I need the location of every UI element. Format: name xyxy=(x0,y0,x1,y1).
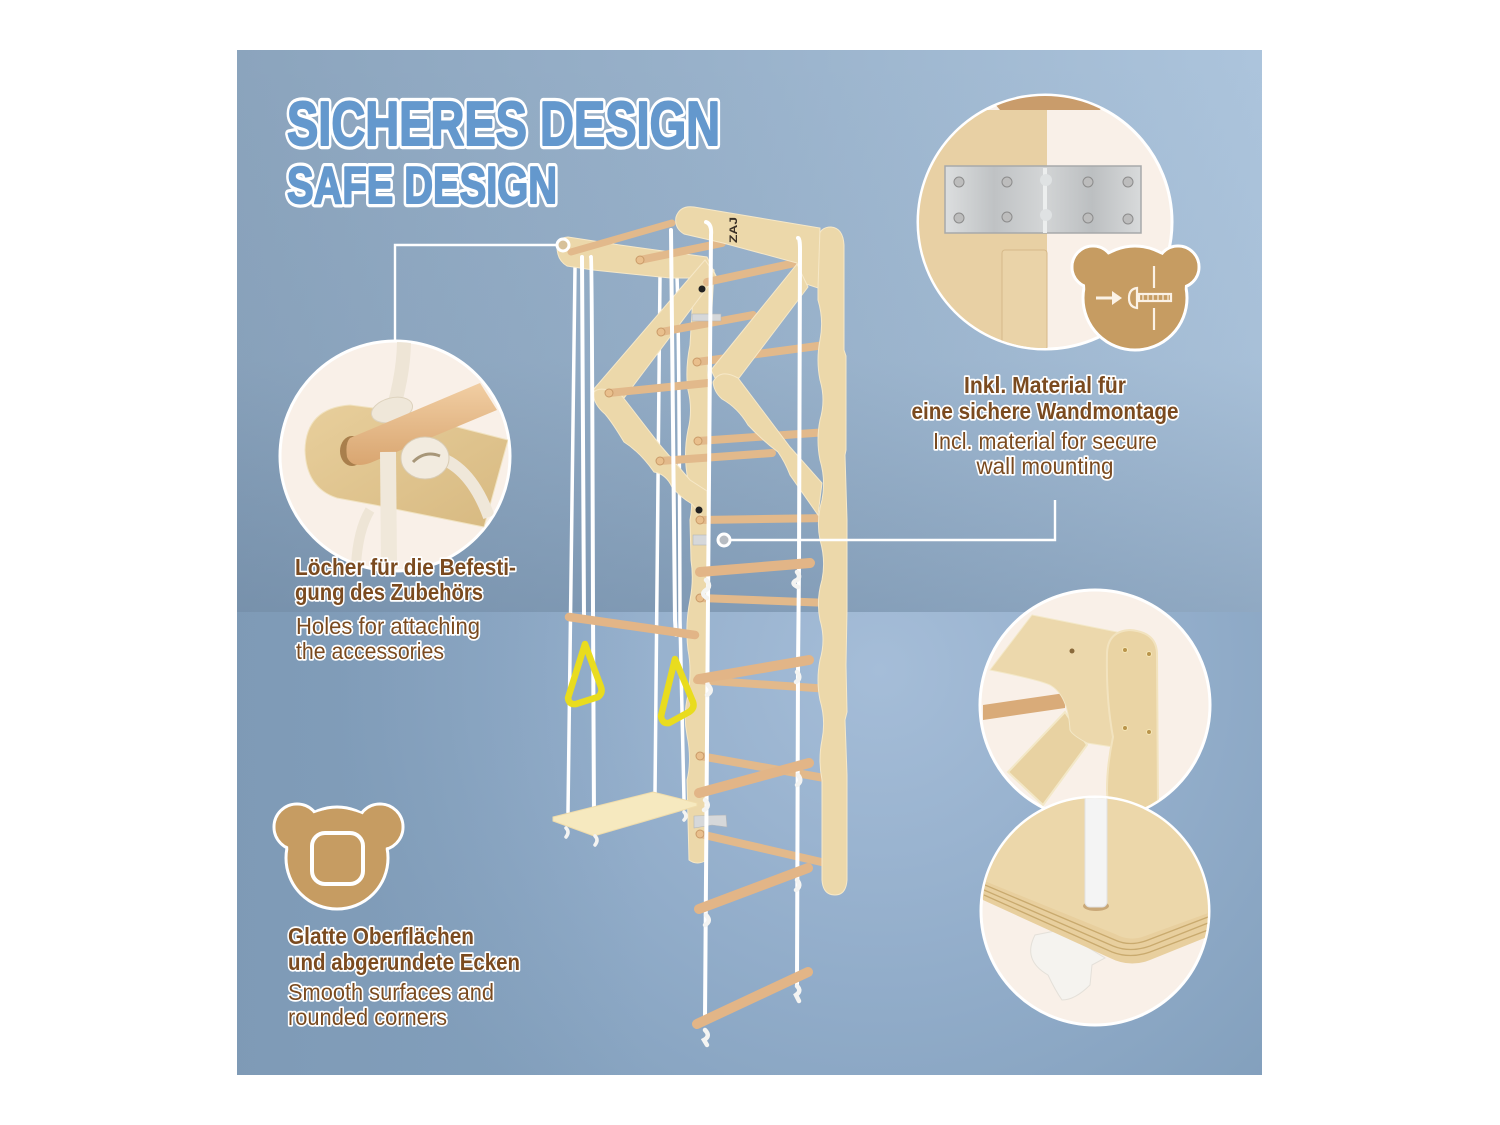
top edge of plate xyxy=(996,96,1100,110)
rope ladder rungs xyxy=(697,563,810,1024)
right top plate xyxy=(676,207,820,288)
panel: joint detail circle xyxy=(980,590,1210,820)
rope hole xyxy=(1083,904,1109,911)
title: SICHERES DESIGN xyxy=(287,90,720,159)
panel: swing seat detail circle xyxy=(975,780,1214,1025)
hole xyxy=(340,436,357,466)
rung ends xyxy=(605,256,704,838)
diagonal brace xyxy=(1008,712,1087,805)
callout line: accessory holes xyxy=(395,239,569,342)
text: wall mounting xyxy=(912,372,1178,479)
rung xyxy=(983,693,1065,720)
yellow ring left xyxy=(568,644,602,704)
lower knot xyxy=(401,437,449,479)
callout line: wall mounting xyxy=(718,500,1055,546)
front ropes xyxy=(582,222,800,1018)
title xyxy=(287,90,720,215)
text: wall mounting: eine sichere Wandmontage xyxy=(912,398,1178,424)
wall bars climbing frame xyxy=(553,207,847,1045)
left post xyxy=(685,262,714,863)
text: wall mounting: Inkl. Material für xyxy=(964,372,1126,398)
text: holes for accessories: Holes for attaching xyxy=(296,613,480,639)
metal brackets xyxy=(692,314,727,828)
white rope xyxy=(1085,795,1107,907)
hanging rope xyxy=(388,452,389,565)
upright post xyxy=(1107,630,1158,810)
text: wall mounting: Incl. material for secure xyxy=(933,428,1157,454)
yellow ring right xyxy=(661,659,694,723)
rear ropes xyxy=(568,265,684,812)
rivets xyxy=(1122,648,1152,734)
right lower brace xyxy=(713,374,822,515)
title: SAFE DESIGN xyxy=(287,157,557,215)
screw symbol xyxy=(1096,266,1171,330)
rounded square symbol xyxy=(312,833,363,884)
left top plate xyxy=(557,237,717,278)
wooden bar xyxy=(346,383,497,465)
black mounting knobs xyxy=(696,286,706,514)
plywood edge xyxy=(980,878,1212,964)
fixed wooden rungs xyxy=(609,243,830,864)
icon: bear badge with rounded square xyxy=(274,804,403,909)
left upper brace xyxy=(593,260,716,402)
logo on plate: ZAJ xyxy=(728,217,740,243)
mounting recess xyxy=(1002,250,1047,350)
plywood plate xyxy=(305,405,508,527)
left lower brace xyxy=(593,389,708,524)
title: SICHERES DESIGN xyxy=(287,90,720,159)
text: smooth surfaces: Smooth surfaces and xyxy=(288,979,494,1005)
text: holes for accessories: gung des Zubehörs xyxy=(295,579,483,605)
plywood top xyxy=(986,798,1208,938)
text: smooth surfaces: Glatte Oberflächen xyxy=(288,923,474,949)
text: holes for accessories: the accessories xyxy=(296,638,444,664)
trapeze bar xyxy=(569,617,695,635)
metal bracket xyxy=(945,166,1141,233)
top bar xyxy=(571,223,672,252)
text: holes for accessories: Löcher für die Befesti- xyxy=(295,554,516,580)
wood panel xyxy=(915,110,1047,360)
plywood laminate layers xyxy=(984,885,1208,956)
horizontal plate xyxy=(990,615,1120,748)
background panel xyxy=(237,50,1262,1075)
upper knot xyxy=(371,396,413,424)
text: smooth surfaces xyxy=(288,923,520,1030)
text: smooth surfaces: rounded corners xyxy=(288,1004,447,1030)
rope knot under seat xyxy=(1031,930,1105,1000)
panel: accessory holes detail circle xyxy=(280,340,510,571)
right post xyxy=(818,227,847,895)
text: holes for accessories xyxy=(295,554,516,664)
text: wall mounting: wall mounting xyxy=(976,453,1114,479)
rope knots xyxy=(703,572,800,1045)
right upper brace xyxy=(711,264,808,388)
upper rope xyxy=(394,340,404,406)
icon: bear badge with screw xyxy=(1072,246,1199,350)
swing seat xyxy=(553,792,697,836)
panel: wall mounting detail circle xyxy=(915,92,1172,360)
swing knots xyxy=(566,812,686,845)
lower rope xyxy=(447,455,494,519)
title: SAFE DESIGN xyxy=(287,157,557,215)
text: smooth surfaces: und abgerundete Ecken xyxy=(288,949,520,975)
